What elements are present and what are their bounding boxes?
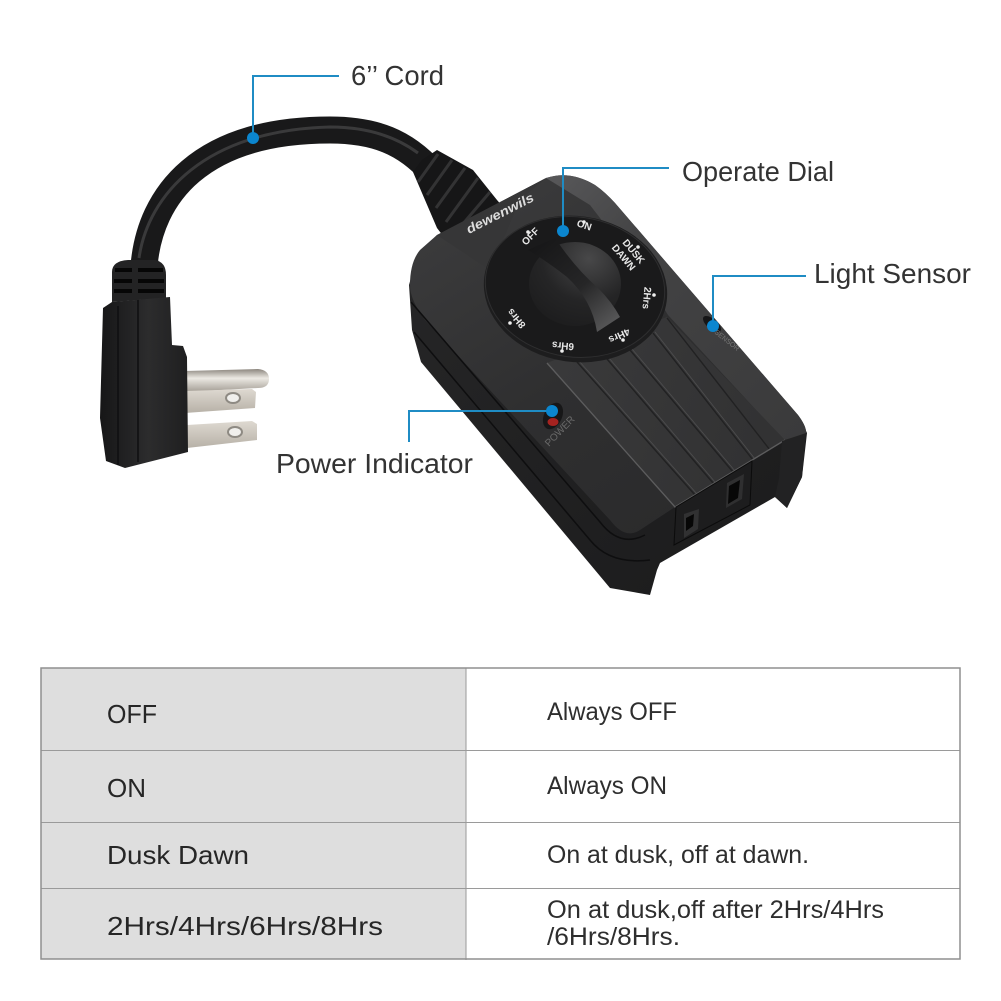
row: Dusk Dawn: On at dusk, off at dawn. <box>547 841 809 869</box>
device top face <box>410 175 806 533</box>
rotary dial <box>474 204 677 374</box>
row: Dusk Dawn <box>107 840 809 870</box>
light sensor <box>700 313 740 353</box>
dial labels: DAWN <box>609 243 637 273</box>
callout: power indicator: Power Indicator <box>276 448 473 479</box>
row: hours: On at dusk,off after 2Hrs/4Hrs <box>547 896 884 924</box>
row: ON <box>107 772 667 803</box>
dial labels <box>505 218 656 353</box>
callout: operate dial <box>557 156 834 237</box>
row: hours <box>107 896 884 951</box>
dial labels: 6Hrs <box>551 339 575 351</box>
power indicator: POWER <box>543 414 577 449</box>
device housing side <box>409 235 807 595</box>
brand logo: dewenwils <box>464 190 536 237</box>
light sensor: SENSOR <box>713 329 740 353</box>
left shoulder slant <box>437 178 546 270</box>
outlet face <box>674 433 806 545</box>
function table <box>41 668 960 960</box>
callout: operate dial: Operate Dial <box>682 156 834 187</box>
power indicator <box>539 400 577 449</box>
icon: angled plug <box>100 260 269 468</box>
knob dome <box>529 242 621 326</box>
row: OFF: Always OFF <box>547 698 677 726</box>
callout: 6 inch cord: 6’’ Cord <box>351 60 444 91</box>
callout: light sensor: Light Sensor <box>814 258 971 289</box>
highlight on upper right edge <box>546 175 806 440</box>
ridged panel <box>547 317 785 507</box>
knob handle <box>528 238 620 332</box>
row: ON: Always ON <box>547 772 667 800</box>
row: hours: 2Hrs/4Hrs/6Hrs/8Hrs <box>107 911 383 941</box>
dial labels: ON <box>575 218 593 234</box>
row: ON: ON <box>107 773 146 803</box>
row: Dusk Dawn: Dusk Dawn <box>107 840 249 870</box>
dial labels: 4Hrs <box>606 325 631 345</box>
row: OFF: OFF <box>107 699 157 729</box>
icon: timer device <box>409 175 807 595</box>
row: hours: /6Hrs/8Hrs. <box>547 923 680 951</box>
dial labels: DUSK <box>620 238 647 267</box>
dial labels: 2Hrs <box>640 286 652 310</box>
icon: power cord <box>139 127 510 266</box>
plug prongs <box>185 369 269 448</box>
dial labels: 8Hrs <box>505 306 528 330</box>
callout: light sensor <box>707 258 971 332</box>
callout: power indicator <box>276 405 558 479</box>
dial labels: OFF <box>520 226 542 248</box>
row: OFF <box>107 698 677 729</box>
callout: 6 inch cord <box>247 60 444 144</box>
